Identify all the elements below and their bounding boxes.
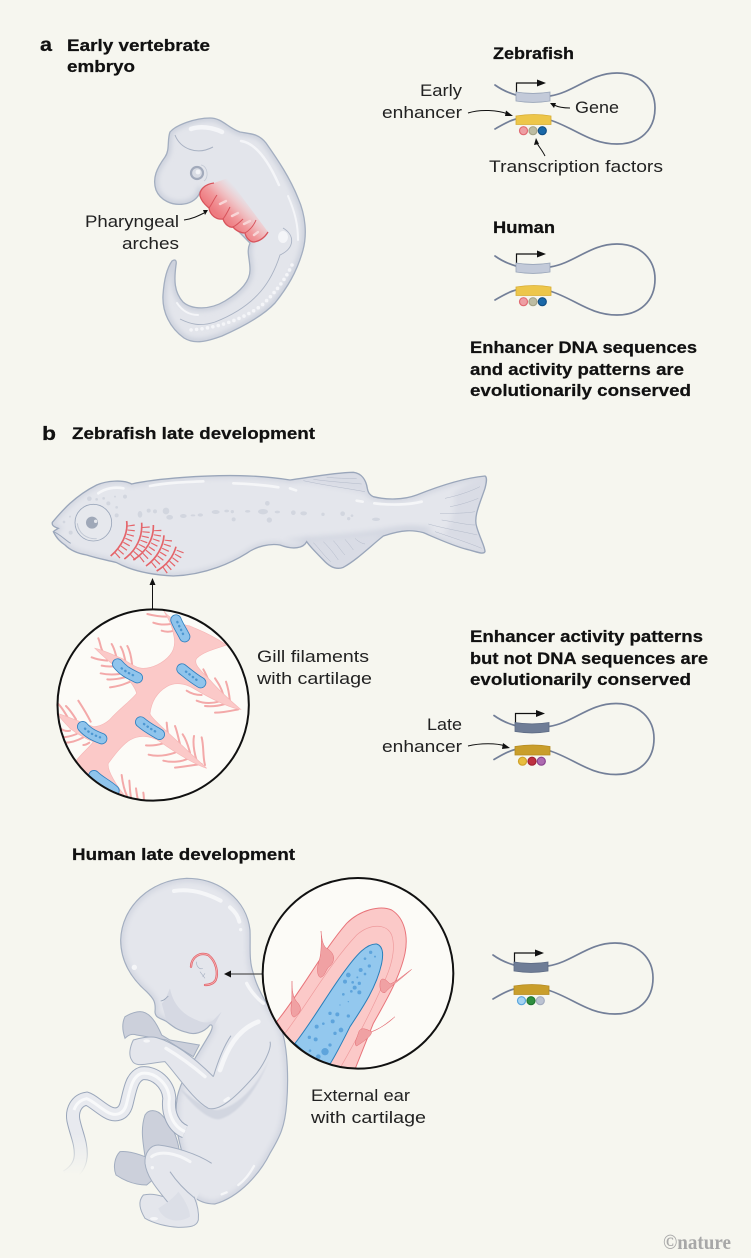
panel: zebrafish late enhancer bbox=[382, 704, 654, 774]
fin rays bbox=[303, 477, 482, 562]
spots bbox=[63, 495, 380, 535]
heading: zebrafish: Zebrafish bbox=[493, 44, 574, 63]
heading: human: Human bbox=[493, 218, 555, 237]
label: pharyngeal arches: Pharyngeal bbox=[85, 212, 179, 231]
conclusion: enhancer DNA sequences conserved: evolutionarily conserved bbox=[470, 381, 691, 400]
panel a heading bbox=[40, 35, 210, 76]
pink cells bbox=[291, 931, 412, 1046]
label: late enhancer bbox=[382, 715, 510, 756]
label: late enhancer: Late bbox=[427, 715, 462, 734]
label: external ear with cartilage: with cartilage bbox=[310, 1108, 426, 1127]
label: gill filaments with cartilage: with cartilage bbox=[256, 669, 372, 688]
panel letter b: b bbox=[42, 424, 56, 445]
DNA loop: human late enhancer bbox=[493, 943, 653, 1014]
label: early enhancer bbox=[382, 81, 513, 122]
far foot and leg bbox=[114, 1111, 180, 1185]
conclusion: activity patterns conserved but not sequences: but not DNA sequences are bbox=[470, 649, 708, 668]
conclusion: activity patterns conserved but not sequences: Enhancer activity patterns bbox=[470, 627, 703, 646]
near arm and hand bbox=[130, 983, 270, 1109]
panel: zebrafish early enhancer bbox=[382, 44, 663, 176]
ear bbox=[191, 954, 217, 985]
mouth line bbox=[53, 532, 71, 543]
label: gene: Gene bbox=[575, 98, 619, 117]
embryo eye bbox=[191, 165, 207, 181]
heading: zebrafish late development: Zebrafish late development bbox=[72, 424, 315, 443]
illustration: zebrafish bbox=[52, 472, 487, 576]
label: external ear with cartilage: External ear bbox=[311, 1086, 410, 1105]
arrow: ear circle to fetus ear bbox=[224, 970, 263, 978]
DNA loop with gene and enhancer bbox=[495, 73, 655, 144]
label: gill filaments with cartilage: Gill filaments bbox=[257, 647, 369, 666]
filaments bbox=[58, 614, 238, 803]
label: late enhancer: enhancer bbox=[382, 737, 462, 756]
DNA loop with gene and enhancer bbox=[495, 244, 655, 315]
nature copyright: ©nature bbox=[663, 1230, 731, 1254]
heading: early vertebrate embryo: embryo bbox=[67, 57, 135, 76]
panel b heading bbox=[42, 424, 315, 445]
heading: early vertebrate embryo: Early vertebrate bbox=[67, 36, 210, 55]
near leg bbox=[140, 1145, 212, 1227]
conclusion: enhancer DNA sequences conserved bbox=[470, 338, 697, 400]
panel letter a: a bbox=[40, 35, 52, 56]
heading: early vertebrate embryo bbox=[67, 36, 210, 76]
head and torso bbox=[121, 878, 288, 1204]
conclusion: activity patterns conserved but not sequences bbox=[470, 627, 708, 689]
highlights bbox=[98, 481, 422, 505]
magnified gill filaments circle bbox=[57, 609, 249, 803]
panel: human early enhancer bbox=[493, 218, 655, 315]
heading: human late development: Human late development bbox=[72, 845, 295, 864]
pink gill arch bbox=[57, 610, 241, 800]
label: early enhancer: Early bbox=[420, 81, 463, 100]
illustration: early vertebrate embryo bbox=[155, 118, 305, 342]
label: pharyngeal arches: arches bbox=[122, 234, 179, 253]
fish eye bbox=[75, 504, 112, 541]
pharyngeal arches bbox=[200, 178, 268, 242]
arrow: gill circle to fish gills bbox=[150, 578, 156, 609]
umbilical cord bbox=[67, 1073, 185, 1177]
label: pharyngeal arches bbox=[85, 210, 208, 253]
magnified external ear circle bbox=[263, 878, 453, 1073]
label: transcription factors: Transcription factors bbox=[489, 157, 663, 176]
cartilage core bbox=[295, 944, 383, 1064]
conclusion: enhancer DNA sequences conserved: and activity patterns are bbox=[470, 360, 684, 379]
label: external ear with cartilage bbox=[310, 1086, 426, 1127]
head highlights bbox=[174, 890, 239, 922]
body highlights bbox=[222, 1166, 254, 1194]
label: early enhancer: enhancer bbox=[382, 103, 462, 122]
gill filaments bbox=[111, 521, 180, 572]
cartilage bbox=[83, 620, 201, 791]
illustration: human fetus bbox=[67, 878, 288, 1227]
DNA loop with gene and late enhancer bbox=[494, 704, 654, 774]
conclusion: enhancer DNA sequences conserved: Enhancer DNA sequences bbox=[470, 338, 697, 357]
conclusion: activity patterns conserved but not sequences: evolutionarily conserved bbox=[470, 670, 691, 689]
label: gill filaments with cartilage bbox=[256, 647, 372, 688]
label: gene bbox=[550, 98, 619, 117]
far arm and hand bbox=[123, 1012, 199, 1057]
label: transcription factors bbox=[489, 138, 663, 176]
